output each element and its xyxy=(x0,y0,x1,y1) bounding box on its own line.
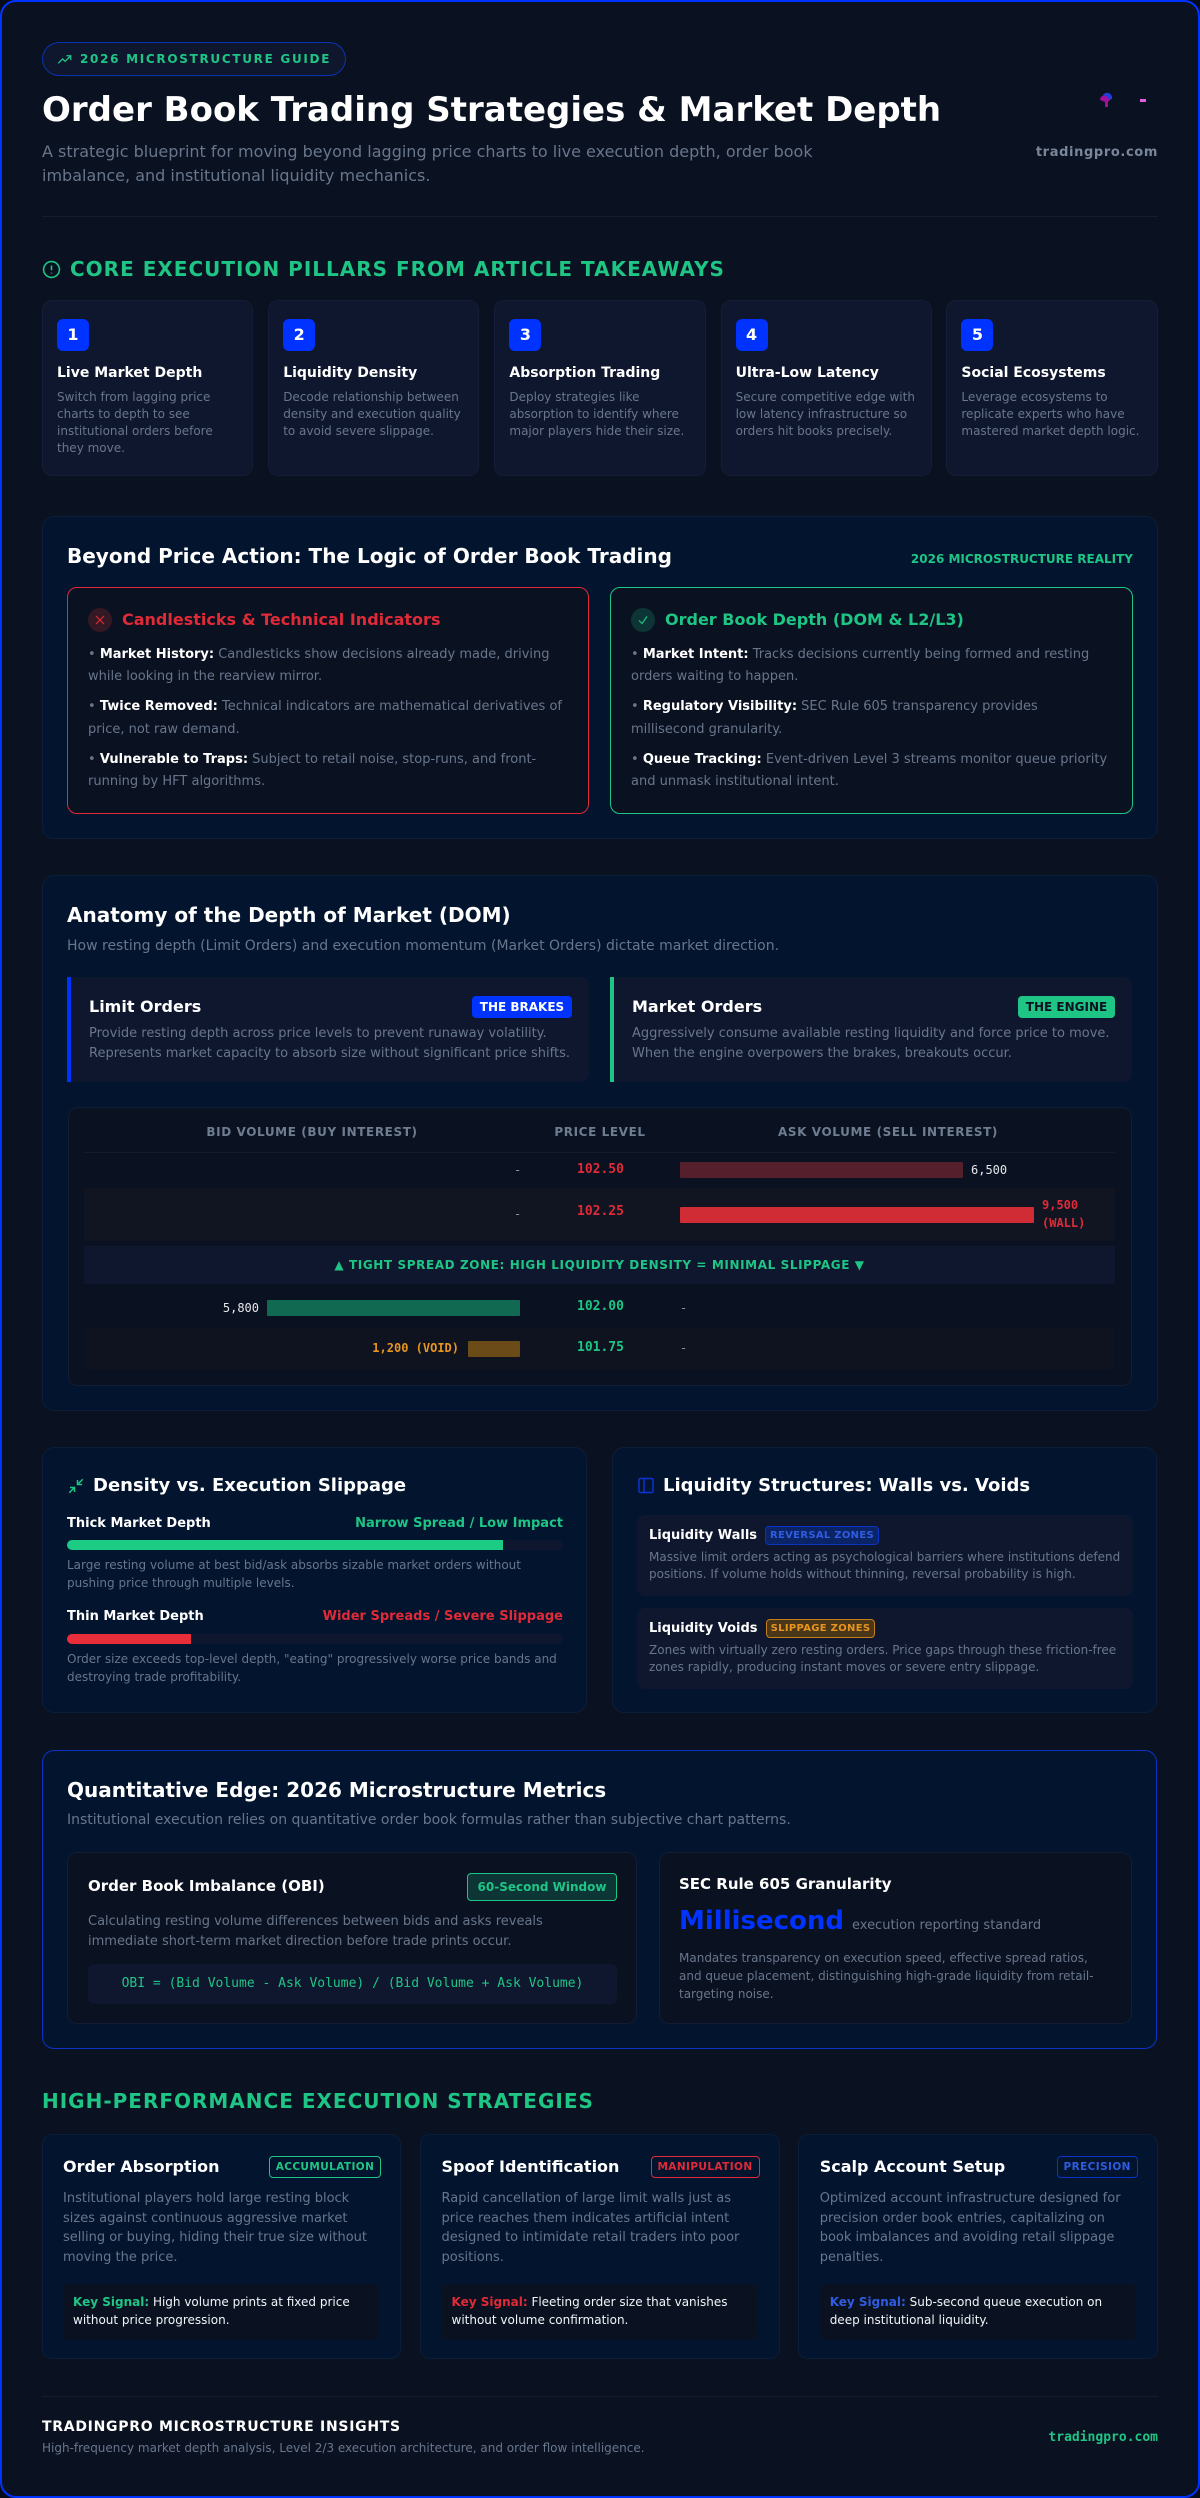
card text: precision order book entries, capitalizing on xyxy=(820,2211,1105,2226)
footer xyxy=(42,2396,1158,2462)
card: market orders xyxy=(610,977,1132,1082)
ask bar xyxy=(680,1162,963,1178)
pillar text: they move. xyxy=(57,441,125,455)
metric: thick label: Thick Market Depth xyxy=(67,1516,211,1531)
pillar card 1 xyxy=(42,300,253,476)
comparison: candlesticks xyxy=(67,587,589,814)
tag: slippage zones xyxy=(766,1619,875,1638)
row: 101.75 void xyxy=(84,1328,1115,1370)
card text: zones rapidly, producing instant moves or severe entry slippage. xyxy=(649,1660,1039,1674)
card: OBI xyxy=(67,1852,637,2024)
bullet list xyxy=(631,647,1107,789)
card text: book imbalances and avoiding retail slippage xyxy=(820,2230,1114,2245)
icon: trending up xyxy=(58,55,72,64)
metric: thick result: Narrow Spread / Low Impact xyxy=(355,1516,563,1531)
card: liquidity walls xyxy=(637,1515,1133,1596)
pillar text xyxy=(509,390,684,438)
thin text: destroying trade profitability. xyxy=(67,1670,241,1684)
tag: precision: PRECISION xyxy=(1064,2161,1131,2173)
brand url: tradingpro.com xyxy=(1036,145,1158,160)
panel: liquidity structures xyxy=(612,1447,1157,1713)
bid empty: - xyxy=(514,1163,521,1177)
pillar text: Switch from lagging price xyxy=(57,390,210,404)
card title: Liquidity Walls xyxy=(649,1528,757,1543)
card title: Spoof Identification xyxy=(442,2157,619,2176)
pillar text: orders hit books precisely. xyxy=(736,424,892,438)
tag: the engine: THE ENGINE xyxy=(1026,1000,1107,1014)
pillar card 2 xyxy=(268,300,479,476)
price: 102.50 xyxy=(577,1162,624,1177)
pillar title: Absorption Trading xyxy=(509,364,660,380)
metric: thin result: Wider Spreads / Severe Slippage xyxy=(323,1609,563,1624)
number badge: 3 xyxy=(520,325,531,344)
card text: targeting noise. xyxy=(679,1987,774,2001)
pillar text xyxy=(283,390,461,438)
signal text xyxy=(452,2295,727,2327)
card text: positions. xyxy=(442,2250,504,2265)
panel: density vs slippage xyxy=(42,1447,587,1713)
card text: and queue placement, distinguishing high-grade liquidity from retail- xyxy=(679,1969,1094,1983)
column header: ask: ASK VOLUME (SELL INTEREST) xyxy=(778,1125,998,1139)
number badge xyxy=(57,319,89,351)
icon: x xyxy=(88,608,112,632)
card text: immediate short-term market direction before trade prints occur. xyxy=(88,1934,511,1949)
panel heading: Anatomy of the Depth of Market (DOM) xyxy=(67,903,511,927)
row: 102.50 xyxy=(514,1162,1007,1178)
pillar title: Social Ecosystems xyxy=(961,364,1106,380)
signal text xyxy=(830,2295,1102,2327)
number badge: 5 xyxy=(972,325,983,344)
card: SEC rule 605 xyxy=(659,1852,1132,2024)
card title: Scalp Account Setup xyxy=(820,2157,1005,2176)
icon: check xyxy=(631,608,655,632)
card title: Liquidity Voids xyxy=(649,1621,758,1636)
void label: 1,200 (VOID) xyxy=(372,1341,459,1355)
subtitle xyxy=(42,142,813,185)
card title: Market Orders xyxy=(632,997,762,1016)
pillar card 3 xyxy=(494,300,706,476)
icon: alert circle xyxy=(42,260,60,278)
card: limit orders xyxy=(67,977,589,1082)
pillar text: institutional orders before xyxy=(57,424,213,438)
subtitle: imbalance, and institutional liquidity mechanics. xyxy=(42,166,430,185)
bullet list: • Market Intent: Tracks decisions currently being formed and resting xyxy=(631,647,1089,662)
key signal xyxy=(820,2284,1136,2340)
tag: accumulation xyxy=(269,2156,381,2178)
bullet list: while looking in the rearview mirror. • Twice Removed: Technical indicators are mathematical derivatives of xyxy=(88,669,562,714)
thin text xyxy=(67,1652,557,1684)
pillar text xyxy=(736,390,915,438)
panel heading: Liquidity Structures: Walls vs. Voids xyxy=(663,1475,1030,1496)
badge text: 2026 MICROSTRUCTURE GUIDE xyxy=(80,52,331,66)
formula: OBI = (Bid Volume - Ask Volume) / (Bid Volume + Ask Volume) xyxy=(122,1976,583,1991)
bullet list: running by HFT algorithms. xyxy=(88,774,265,789)
strategy card: spoof identification xyxy=(420,2134,780,2359)
number badge xyxy=(283,319,315,351)
card text: moving the price. xyxy=(63,2250,178,2265)
tag: the brakes: THE BRAKES xyxy=(480,1000,564,1014)
bullet list xyxy=(88,647,562,789)
panel heading: Density vs. Execution Slippage xyxy=(93,1475,406,1496)
card text: Mandates transparency on execution speed, effective spread ratios, xyxy=(679,1951,1088,1965)
signal text: without volume confirmation. xyxy=(452,2313,628,2327)
card text xyxy=(649,1550,1120,1581)
signal text: deep institutional liquidity. xyxy=(830,2313,989,2327)
tag: 60-second window: 60-Second Window xyxy=(478,1880,606,1894)
pillar text: absorption to identify where xyxy=(509,407,679,421)
metric caption: execution reporting standard xyxy=(852,1918,1041,1933)
card text xyxy=(89,1026,570,1061)
pillar text: charts to depth to see xyxy=(57,407,190,421)
card title: SEC Rule 605 Granularity xyxy=(679,1875,892,1893)
column header: price: PRICE LEVEL xyxy=(554,1125,646,1139)
title: Order Book Trading Strategies & Market Depth xyxy=(42,90,941,130)
panel tag: 2026 MICROSTRUCTURE REALITY xyxy=(911,552,1133,566)
tag: manipulation: MANIPULATION xyxy=(657,2161,753,2173)
spread zone: ▲ TIGHT SPREAD ZONE: HIGH LIQUIDITY DENSITY = MINIMAL SLIPPAGE ▼ xyxy=(334,1258,865,1272)
card text: selling or buying, hiding their true size without xyxy=(63,2230,367,2245)
row: 102.25 wall xyxy=(84,1188,1115,1241)
void bar xyxy=(468,1341,520,1357)
thick text: Large resting volume at best bid/ask absorbs sizable market orders without xyxy=(67,1558,521,1572)
pillar text: Secure competitive edge with xyxy=(736,390,915,404)
card title: Limit Orders xyxy=(89,997,201,1016)
divider xyxy=(42,216,1158,217)
thin text: Order size exceeds top-level depth, "eating" progressively worse price bands and xyxy=(67,1652,557,1666)
ask bar wall xyxy=(680,1207,1034,1223)
pillar text: major players hide their size. xyxy=(509,424,684,438)
icon: columns xyxy=(638,1478,654,1494)
card text: Provide resting depth across price levels to prevent runaway volatility. xyxy=(89,1026,547,1041)
pillar text: mastered market depth logic. xyxy=(961,424,1139,438)
wall label xyxy=(1042,1198,1085,1230)
card text: Calculating resting volume differences between bids and asks reveals xyxy=(88,1914,543,1929)
card text xyxy=(679,1951,1094,2001)
section: core execution pillars xyxy=(42,257,725,281)
card text: When the engine overpowers the brakes, breakouts occur. xyxy=(632,1046,1012,1061)
panel heading: Beyond Price Action: The Logic of Order Book Trading xyxy=(67,544,672,568)
tag: accumulation: ACCUMULATION xyxy=(276,2161,374,2173)
badge: 2026 microstructure guide xyxy=(42,42,346,76)
pillar text: to avoid severe slippage. xyxy=(283,424,434,438)
bullet list: orders waiting to happen. • Regulatory Visibility: SEC Rule 605 transparency provides xyxy=(631,669,1038,714)
wall label: 9,500 xyxy=(1042,1198,1078,1212)
tag: the brakes xyxy=(472,996,572,1018)
card text: Rapid cancellation of large limit walls just as xyxy=(442,2191,731,2206)
signal text xyxy=(73,2295,350,2327)
tag: precision xyxy=(1057,2156,1138,2178)
pillar title: Liquidity Density xyxy=(283,364,417,380)
card text xyxy=(649,1643,1116,1674)
signal text: Key Signal: High volume prints at fixed price xyxy=(73,2295,350,2309)
card text: price reaches them indicates artificial intent xyxy=(442,2211,729,2226)
spread zone xyxy=(84,1246,1115,1284)
number badge xyxy=(509,319,541,351)
panel: quantitative edge xyxy=(42,1750,1157,2049)
comparison heading: Order Book Depth (DOM & L2/L3) xyxy=(665,610,964,629)
ask volume: 6,500 xyxy=(971,1163,1007,1177)
formula xyxy=(88,1964,617,2004)
price: 102.25 xyxy=(577,1204,624,1219)
card text: sizes against continuous aggressive market xyxy=(63,2211,347,2226)
DOM ladder table xyxy=(68,1107,1132,1386)
bullet list: and unmask institutional intent. xyxy=(631,774,839,789)
ask empty: - xyxy=(680,1341,687,1355)
card text: Massive limit orders acting as psychological barriers where institutions defend xyxy=(649,1550,1120,1564)
strategy card: scalp account setup xyxy=(798,2134,1158,2359)
key signal xyxy=(442,2284,758,2340)
panel: anatomy of the DOM xyxy=(42,875,1158,1411)
bullet list: price, not raw demand. • Vulnerable to Traps: Subject to retail noise, stop-runs, and front- xyxy=(88,722,536,767)
thick text xyxy=(67,1558,521,1590)
card: liquidity voids xyxy=(637,1608,1133,1689)
section heading: strategies: HIGH-PERFORMANCE EXECUTION STRATEGIES xyxy=(42,2089,594,2113)
tag: the engine xyxy=(1018,996,1115,1018)
subtitle: A strategic blueprint for moving beyond lagging price charts to live execution depth, order book xyxy=(42,142,813,161)
card text xyxy=(632,1026,1110,1061)
price: 101.75 xyxy=(577,1340,624,1355)
key signal xyxy=(63,2284,379,2340)
card text: Optimized account infrastructure designed for xyxy=(820,2191,1121,2206)
tag: 60-second window xyxy=(467,1873,617,1901)
header xyxy=(42,42,1158,217)
card text: designed to intimidate retail traders into poor xyxy=(442,2230,739,2245)
footer subtitle: High-frequency market depth analysis, Level 2/3 execution architecture, and order flow intelligence. xyxy=(42,2441,645,2455)
pillar card 5 xyxy=(946,300,1158,476)
metric: thin label: Thin Market Depth xyxy=(67,1609,204,1624)
strategy card: order absorption xyxy=(42,2134,401,2359)
number badge xyxy=(736,319,768,351)
pillar text xyxy=(961,390,1139,438)
pillar text: replicate experts who have xyxy=(961,407,1125,421)
pillar text: Decode relationship between xyxy=(283,390,459,404)
card text: Institutional players hold large resting block xyxy=(63,2191,349,2206)
number badge xyxy=(961,319,993,351)
bid empty: - xyxy=(514,1207,521,1221)
number badge: 4 xyxy=(746,325,757,344)
card text xyxy=(442,2191,740,2265)
thick text: pushing price through multiple levels. xyxy=(67,1576,295,1590)
bar: thin depth xyxy=(67,1634,563,1644)
signal text: without price progression. xyxy=(73,2313,230,2327)
row: 102.00 xyxy=(223,1299,687,1316)
bullet list: • Market History: Candlesticks show decisions already made, driving xyxy=(88,647,550,662)
signal text: Key Signal: Fleeting order size that vanishes xyxy=(452,2295,727,2309)
pillar title: Live Market Depth xyxy=(57,364,202,380)
pillar text: Deploy strategies like xyxy=(509,390,640,404)
pillar text: low latency infrastructure so xyxy=(736,407,907,421)
comparison: order book depth xyxy=(610,587,1133,814)
bullet list: millisecond granularity. • Queue Tracking: Event-driven Level 3 streams monitor queue priority xyxy=(631,722,1107,767)
tag: slippage zones: SLIPPAGE ZONES xyxy=(771,1623,870,1634)
logo mark xyxy=(1100,92,1146,107)
card text: Aggressively consume available resting liquidity and force price to move. xyxy=(632,1026,1110,1041)
pillar card 4 xyxy=(721,300,932,476)
tag: reversal zones xyxy=(765,1526,879,1545)
price: 102.00 xyxy=(577,1299,624,1314)
panel subtitle: Institutional execution relies on quantitative order book formulas rather than subjective chart patterns. xyxy=(67,1812,791,1828)
bid bar xyxy=(267,1300,520,1316)
card text xyxy=(88,1914,543,1949)
tag: manipulation xyxy=(650,2156,760,2178)
wall label: (WALL) xyxy=(1042,1216,1085,1230)
column header: bid: BID VOLUME (BUY INTEREST) xyxy=(206,1125,418,1139)
pillar text: density and execution quality xyxy=(283,407,461,421)
card text: positions. If volume holds without thinning, reversal probability is high. xyxy=(649,1567,1076,1581)
card text: penalties. xyxy=(820,2250,883,2265)
section heading: CORE EXECUTION PILLARS FROM ARTICLE TAKEAWAYS xyxy=(70,257,725,281)
pillar title: Ultra-Low Latency xyxy=(736,364,879,380)
number badge: 2 xyxy=(294,325,305,344)
icon: compress arrows xyxy=(68,1478,84,1494)
pillar text: Leverage ecosystems to xyxy=(961,390,1108,404)
card text xyxy=(820,2191,1121,2265)
card title: Order Book Imbalance (OBI) xyxy=(88,1877,325,1895)
card text: Represents market capacity to absorb size without significant price shifts. xyxy=(89,1046,570,1061)
pillar text xyxy=(57,390,213,455)
footer url: tradingpro.com xyxy=(1048,2430,1158,2445)
card text: Zones with virtually zero resting orders. Price gaps through these friction-free xyxy=(649,1643,1116,1657)
tag: reversal zones: REVERSAL ZONES xyxy=(770,1530,874,1541)
footer title: TRADINGPRO MICROSTRUCTURE INSIGHTS xyxy=(42,2419,401,2435)
card title: Order Absorption xyxy=(63,2157,219,2176)
big metric: Millisecond xyxy=(679,1906,844,1936)
card text xyxy=(63,2191,367,2265)
panel heading: Quantitative Edge: 2026 Microstructure Metrics xyxy=(67,1778,606,1802)
number badge: 1 xyxy=(67,325,79,344)
signal text: Key Signal: Sub-second queue execution on xyxy=(830,2295,1102,2309)
comparison heading: Candlesticks & Technical Indicators xyxy=(122,610,440,629)
panel subtitle: How resting depth (Limit Orders) and execution momentum (Market Orders) dictate market direction. xyxy=(67,938,779,954)
ask empty: - xyxy=(680,1301,687,1315)
bar: thick depth xyxy=(67,1540,563,1550)
panel: beyond price action xyxy=(42,516,1158,839)
bid volume: 5,800 xyxy=(223,1301,259,1315)
